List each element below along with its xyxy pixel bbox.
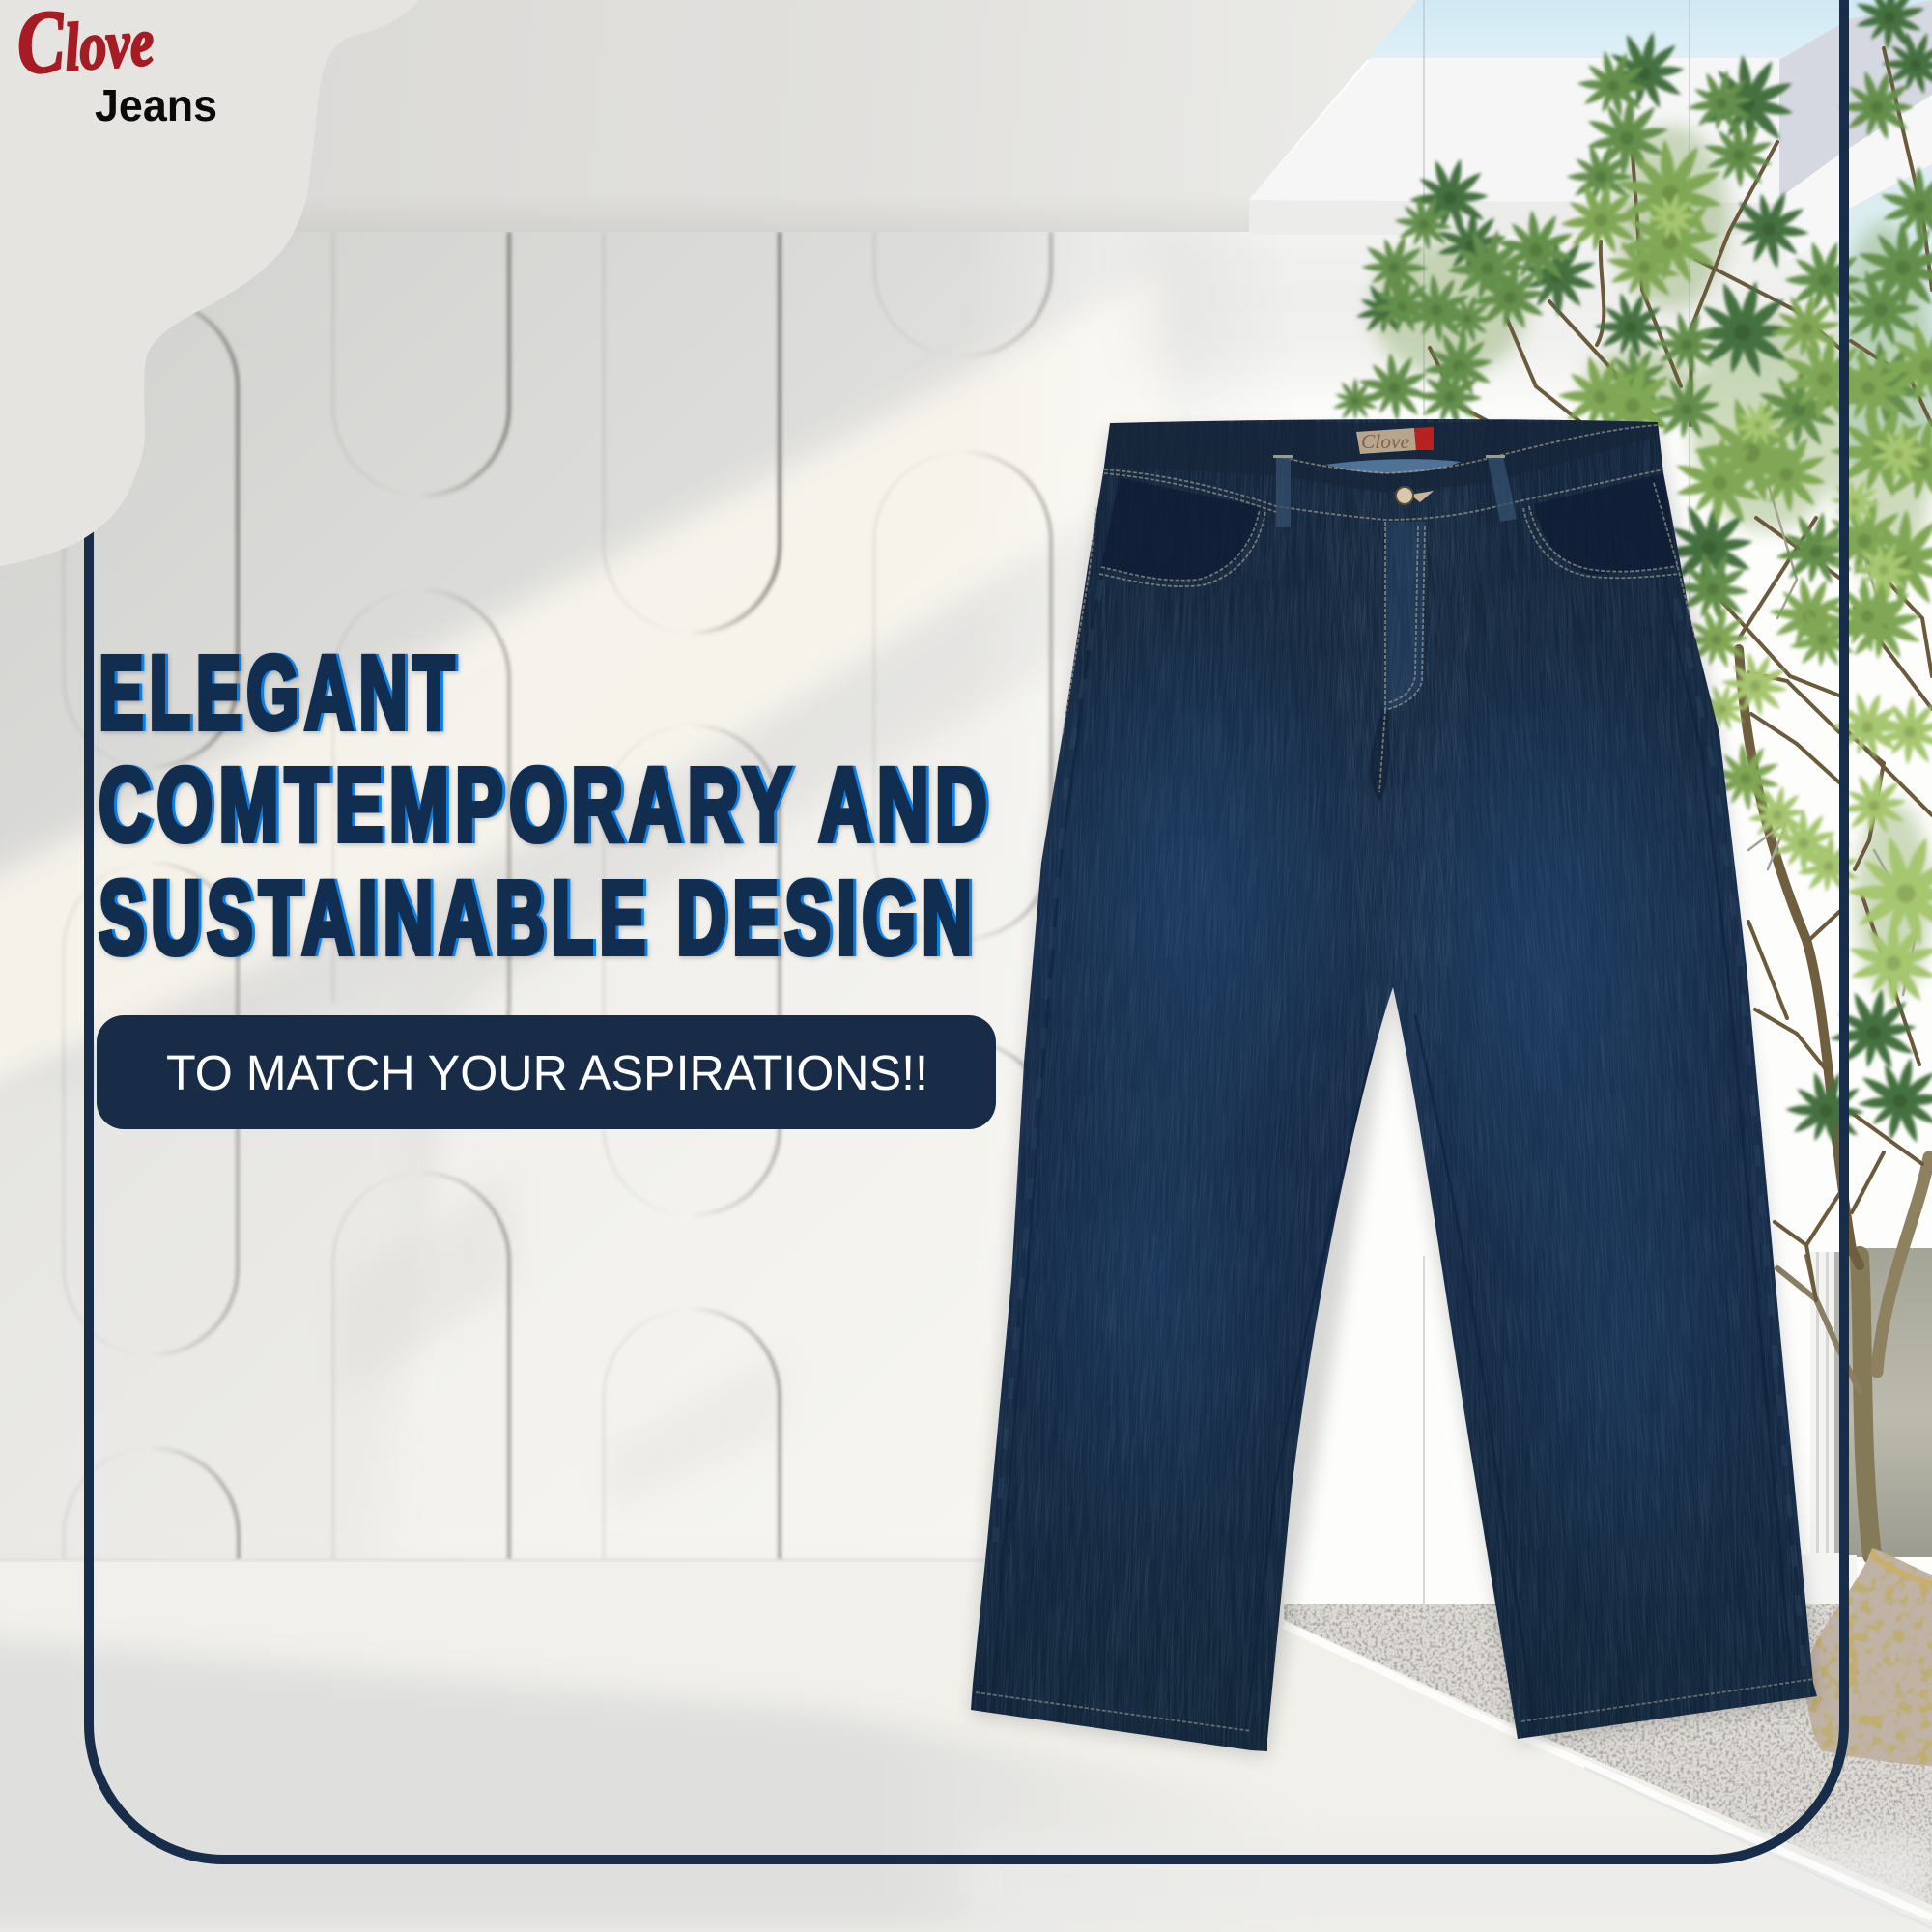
leaf clusters [1332, 0, 1932, 1159]
floor [0, 1560, 1932, 1932]
belt loop right [1486, 455, 1517, 522]
belt loop left [1273, 455, 1293, 527]
floor bottom tone [966, 1835, 1932, 1932]
sky right of frame [1849, 164, 1932, 464]
back waistband inner [1104, 422, 1658, 493]
jeans product photo [966, 419, 1820, 1761]
ceiling [0, 0, 1417, 232]
left lower wall lift [0, 1005, 406, 1565]
logo blob [0, 0, 418, 566]
leg seam puckers [995, 580, 1804, 1671]
arch left-edge highlights [64, 232, 963, 1560]
window slats [1810, 1252, 1839, 1556]
inner lining [1325, 459, 1461, 473]
bright green leaf clusters [1549, 119, 1932, 823]
headline line 1: ELEGANT [99, 634, 460, 751]
waist label: Clove [1361, 430, 1409, 453]
pill background [97, 1015, 996, 1129]
jeans soft shadow [971, 428, 1817, 1757]
waist label [1356, 427, 1434, 454]
dark leaf clusters [1353, 0, 1932, 1159]
white beam [1779, 95, 1932, 261]
headline [99, 634, 993, 976]
left shin fade [1076, 1133, 1234, 1451]
arch right-edge shadows lower [151, 1041, 1051, 1560]
left thigh fade [1076, 675, 1321, 1080]
floor edge line [1584, 1768, 1932, 1928]
denim base colour [956, 415, 1826, 1758]
wall base line [0, 1558, 1284, 1562]
mid-green leaf clusters [1332, 39, 1932, 633]
arch right-edge shadows middle [151, 452, 1051, 1355]
logo wordmark [14, 0, 217, 130]
right white wall [966, 232, 1932, 1604]
rock rim highlight [1870, 1553, 1932, 1584]
fly stitching [1384, 522, 1386, 710]
fly panel [1385, 522, 1425, 710]
right front pocket [1534, 473, 1677, 575]
ceiling lower shadow [0, 193, 1249, 232]
jeans body [971, 419, 1817, 1751]
recessed arch panels [64, 232, 1051, 1560]
tagline pill [97, 1015, 996, 1129]
rock planter [1806, 1548, 1932, 1766]
headline line 2: COMTEMPORARY AND [99, 746, 993, 863]
button [1396, 487, 1434, 504]
gravel bed [1284, 1604, 1932, 1905]
right shin fade [1551, 1207, 1695, 1505]
ledge [1799, 1555, 1857, 1611]
dappled wall shade [338, 1169, 512, 1401]
outer seams [993, 473, 1792, 1729]
left front pocket [1101, 478, 1262, 581]
floor edge highlight [1284, 1625, 1932, 1918]
stitching [1063, 425, 1695, 792]
hems [976, 1679, 1814, 1731]
foliage soft masses [1372, 126, 1932, 995]
lower sunlight [367, 618, 1208, 1565]
dappled wall shade 2 [609, 1352, 782, 1507]
rock body [1806, 1548, 1932, 1766]
distant backdrop right of frame [1849, 1248, 1932, 1557]
denim streaks dark [956, 415, 1826, 1758]
upper wall tone on right [1140, 217, 1835, 382]
right leg denim streaks light [1324, 419, 1816, 1739]
brand sub-name: Jeans [95, 80, 217, 130]
light roof panel [1249, 58, 1779, 203]
waistband stitching [1104, 469, 1663, 520]
right pocket stitching [1529, 506, 1677, 572]
thin vertical glass lines [1424, 0, 1690, 1686]
pill text: TO MATCH YOUR ASPIRATIONS!! [166, 1045, 928, 1100]
trunks and branches [1430, 48, 1932, 1555]
roof band [1249, 200, 1787, 235]
grey block [1779, 0, 1932, 198]
lime leaf clusters [1638, 182, 1932, 1022]
sky [1333, 0, 1932, 60]
left pocket stitching [1101, 509, 1260, 581]
right thigh fade [1426, 730, 1667, 1184]
left leg denim streaks light [974, 419, 1485, 1751]
crotch fold [1370, 710, 1389, 802]
sunbeam on wall [0, 270, 1169, 1111]
floor shade [0, 1633, 1304, 1932]
tree with branches and leaves [1332, 0, 1932, 1555]
wall [0, 222, 1932, 1565]
arch right-edge shadows upper [151, 232, 1051, 767]
headline line 3: SUSTAINABLE DESIGN [99, 859, 978, 976]
